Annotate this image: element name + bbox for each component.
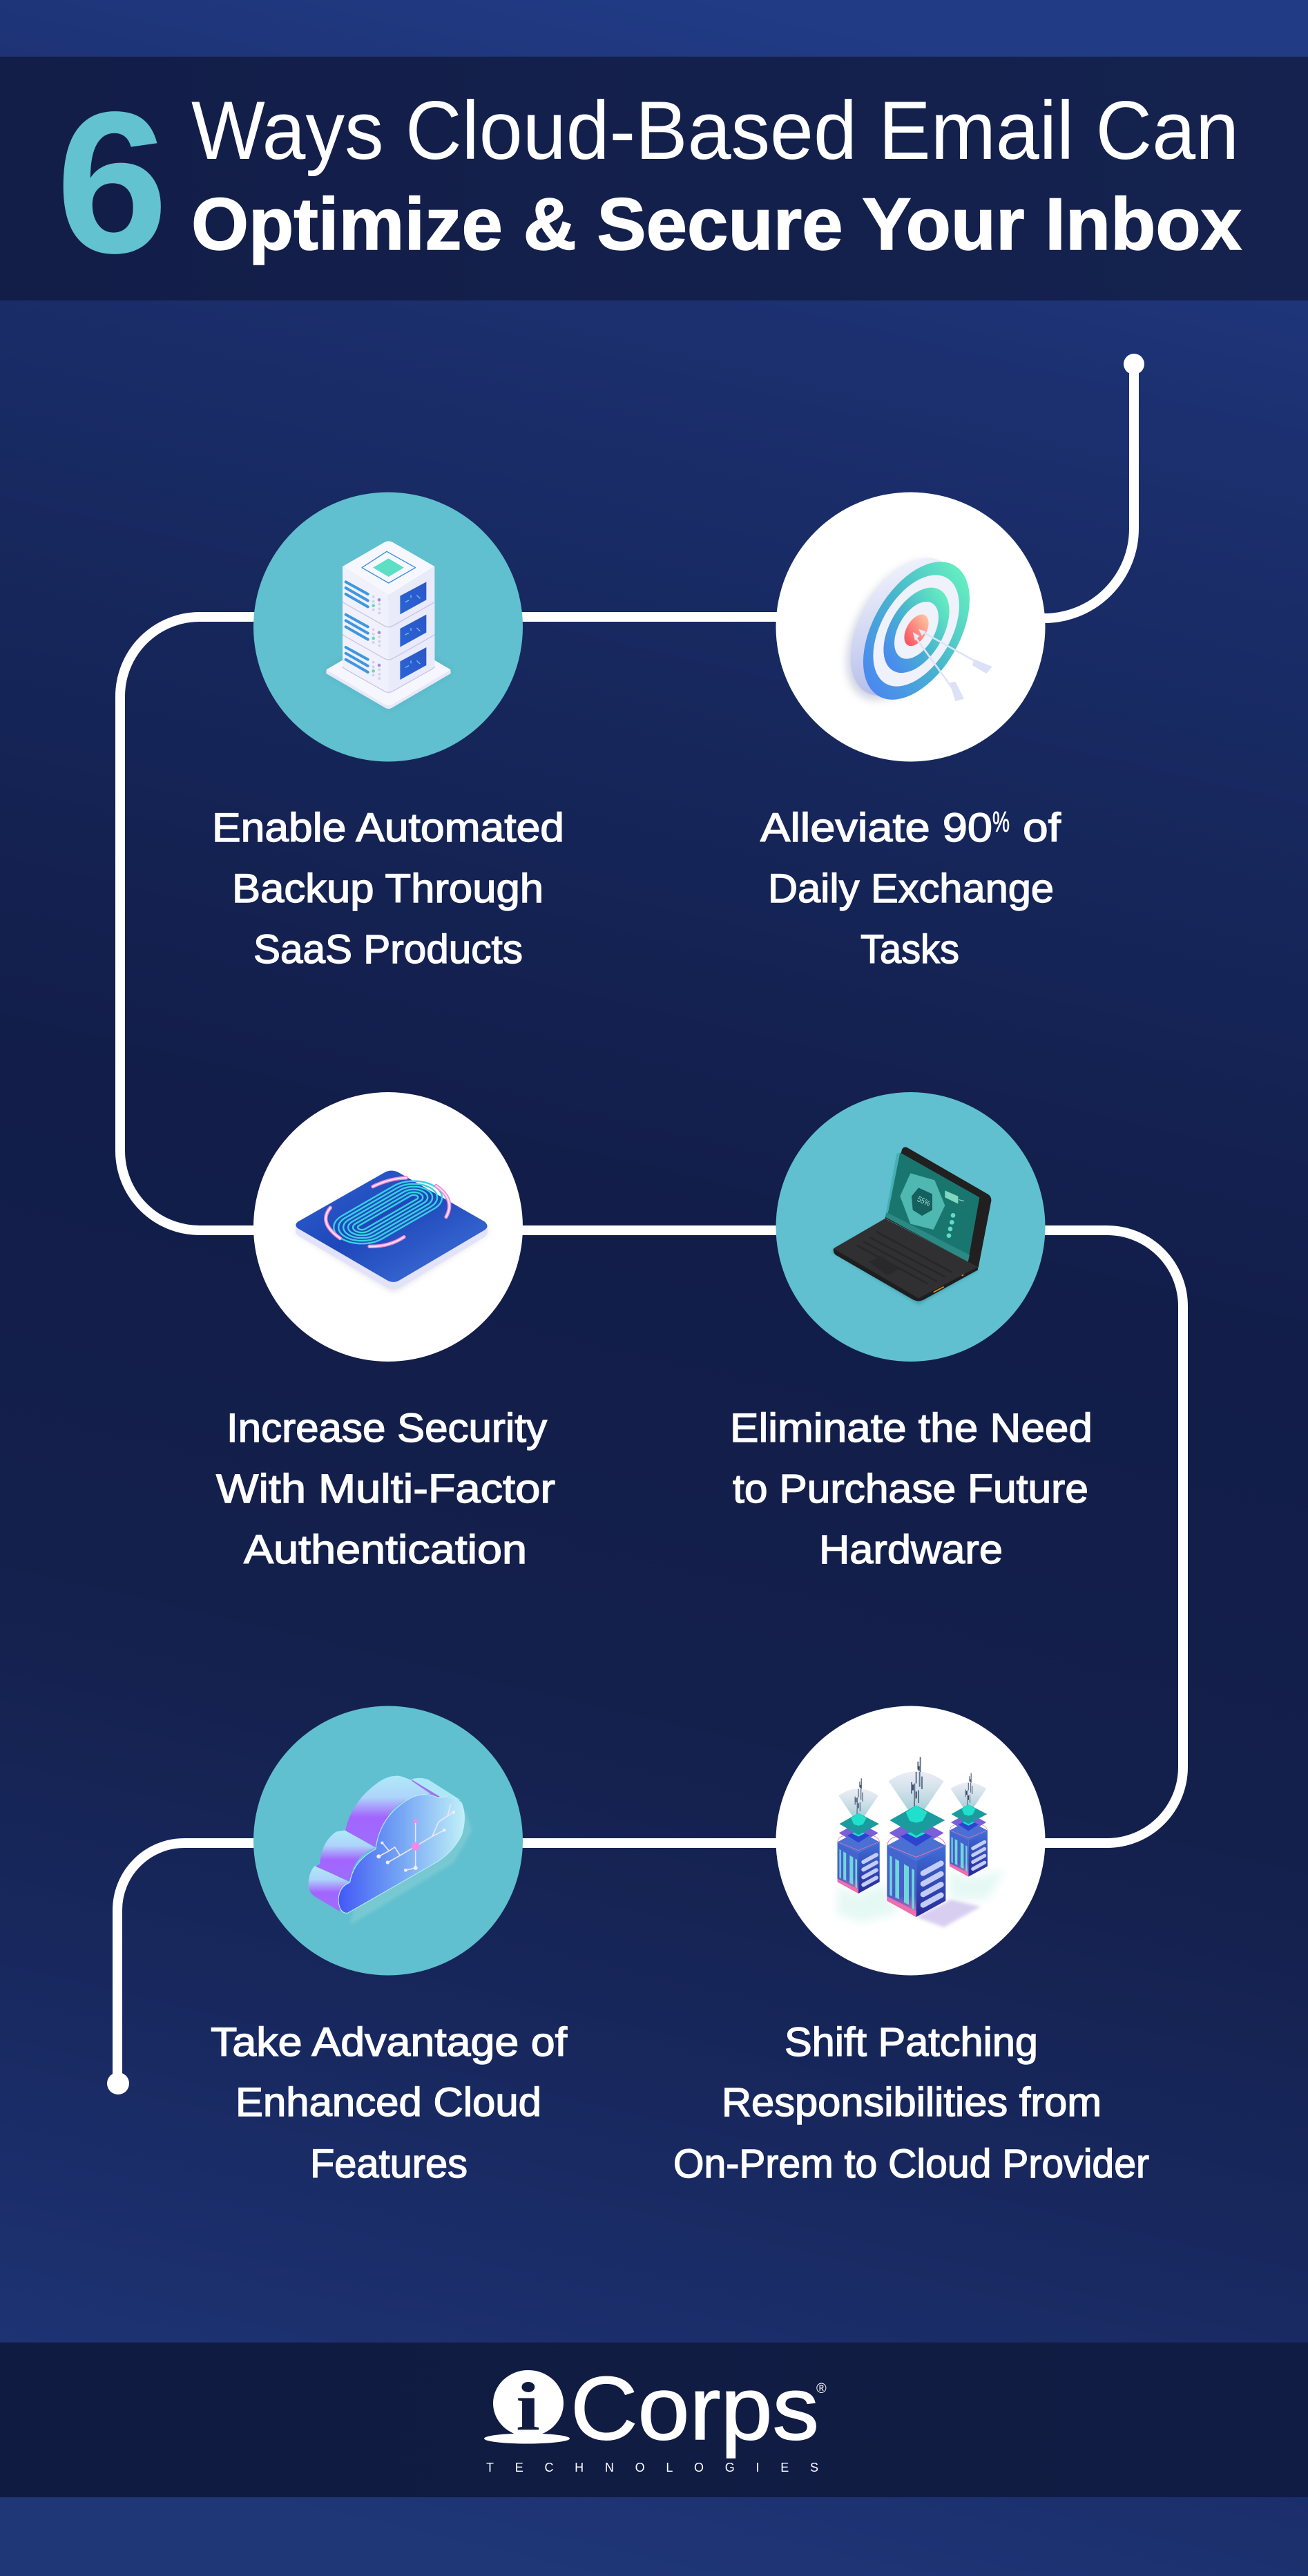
icon: server tower bbox=[326, 541, 451, 709]
logo: iCorps Technologies: ® bbox=[816, 2381, 827, 2396]
label: Daily Exchange bbox=[768, 866, 1054, 911]
label: Eliminate the Need bbox=[730, 1406, 1093, 1451]
icon: laptop bbox=[831, 1147, 991, 1304]
label: Responsibilities from bbox=[722, 2080, 1102, 2125]
label: Take Advantage of bbox=[211, 2020, 568, 2065]
label bbox=[673, 2020, 1149, 2186]
label: Tasks bbox=[860, 927, 959, 972]
label bbox=[211, 2020, 568, 2186]
label: Enhanced Cloud bbox=[235, 2080, 541, 2125]
icon: laptop: 55% bbox=[916, 1195, 932, 1208]
label: On-Prem to Cloud Provider bbox=[673, 2141, 1149, 2186]
label bbox=[730, 1406, 1093, 1572]
title: Optimize & Secure Your Inbox bbox=[191, 182, 1242, 265]
logo: iCorps Technologies: TECHNOLOGIES bbox=[486, 2461, 818, 2474]
label: Backup Through bbox=[232, 866, 544, 911]
icon: data servers bbox=[837, 1757, 1006, 1927]
connector path bbox=[107, 354, 1183, 2095]
header band bbox=[0, 57, 1308, 300]
label: of bbox=[1023, 805, 1061, 850]
label bbox=[216, 1406, 555, 1572]
step: shift patching bbox=[673, 1706, 1149, 2186]
label bbox=[760, 805, 1061, 972]
label: to Purchase Future bbox=[733, 1467, 1088, 1511]
title bbox=[191, 84, 1242, 265]
footer band bbox=[0, 2343, 1308, 2497]
label: Alleviate 90 bbox=[760, 805, 992, 850]
logo: iCorps Technologies: i bbox=[516, 2368, 540, 2445]
logo: iCorps Technologies: Corps bbox=[570, 2358, 819, 2459]
icon: target with arrows bbox=[825, 540, 992, 718]
label: % bbox=[992, 805, 1010, 838]
step: multi-factor authentication bbox=[216, 1092, 555, 1572]
label: With Multi-Factor bbox=[216, 1467, 555, 1511]
label: Enable Automated bbox=[212, 805, 564, 850]
step: eliminate hardware bbox=[730, 1092, 1093, 1572]
step: alleviate 90% bbox=[760, 492, 1061, 972]
icon: fingerprint pad bbox=[296, 1171, 488, 1290]
label: Features bbox=[310, 2141, 468, 2186]
label bbox=[212, 805, 564, 972]
step: enhanced cloud features bbox=[211, 1706, 568, 2186]
label: Increase Security bbox=[227, 1406, 547, 1451]
big number 6: 6 bbox=[56, 70, 168, 295]
label: Authentication bbox=[244, 1527, 527, 1572]
label: Shift Patching bbox=[785, 2020, 1038, 2065]
label: Hardware bbox=[819, 1527, 1003, 1572]
logo: iCorps Technologies bbox=[484, 2358, 827, 2474]
step: enable automated backup bbox=[212, 492, 564, 972]
icon: cloud bbox=[309, 1776, 472, 1925]
label: SaaS Products bbox=[253, 927, 523, 972]
title: Ways Cloud-Based Email Can bbox=[191, 84, 1239, 177]
